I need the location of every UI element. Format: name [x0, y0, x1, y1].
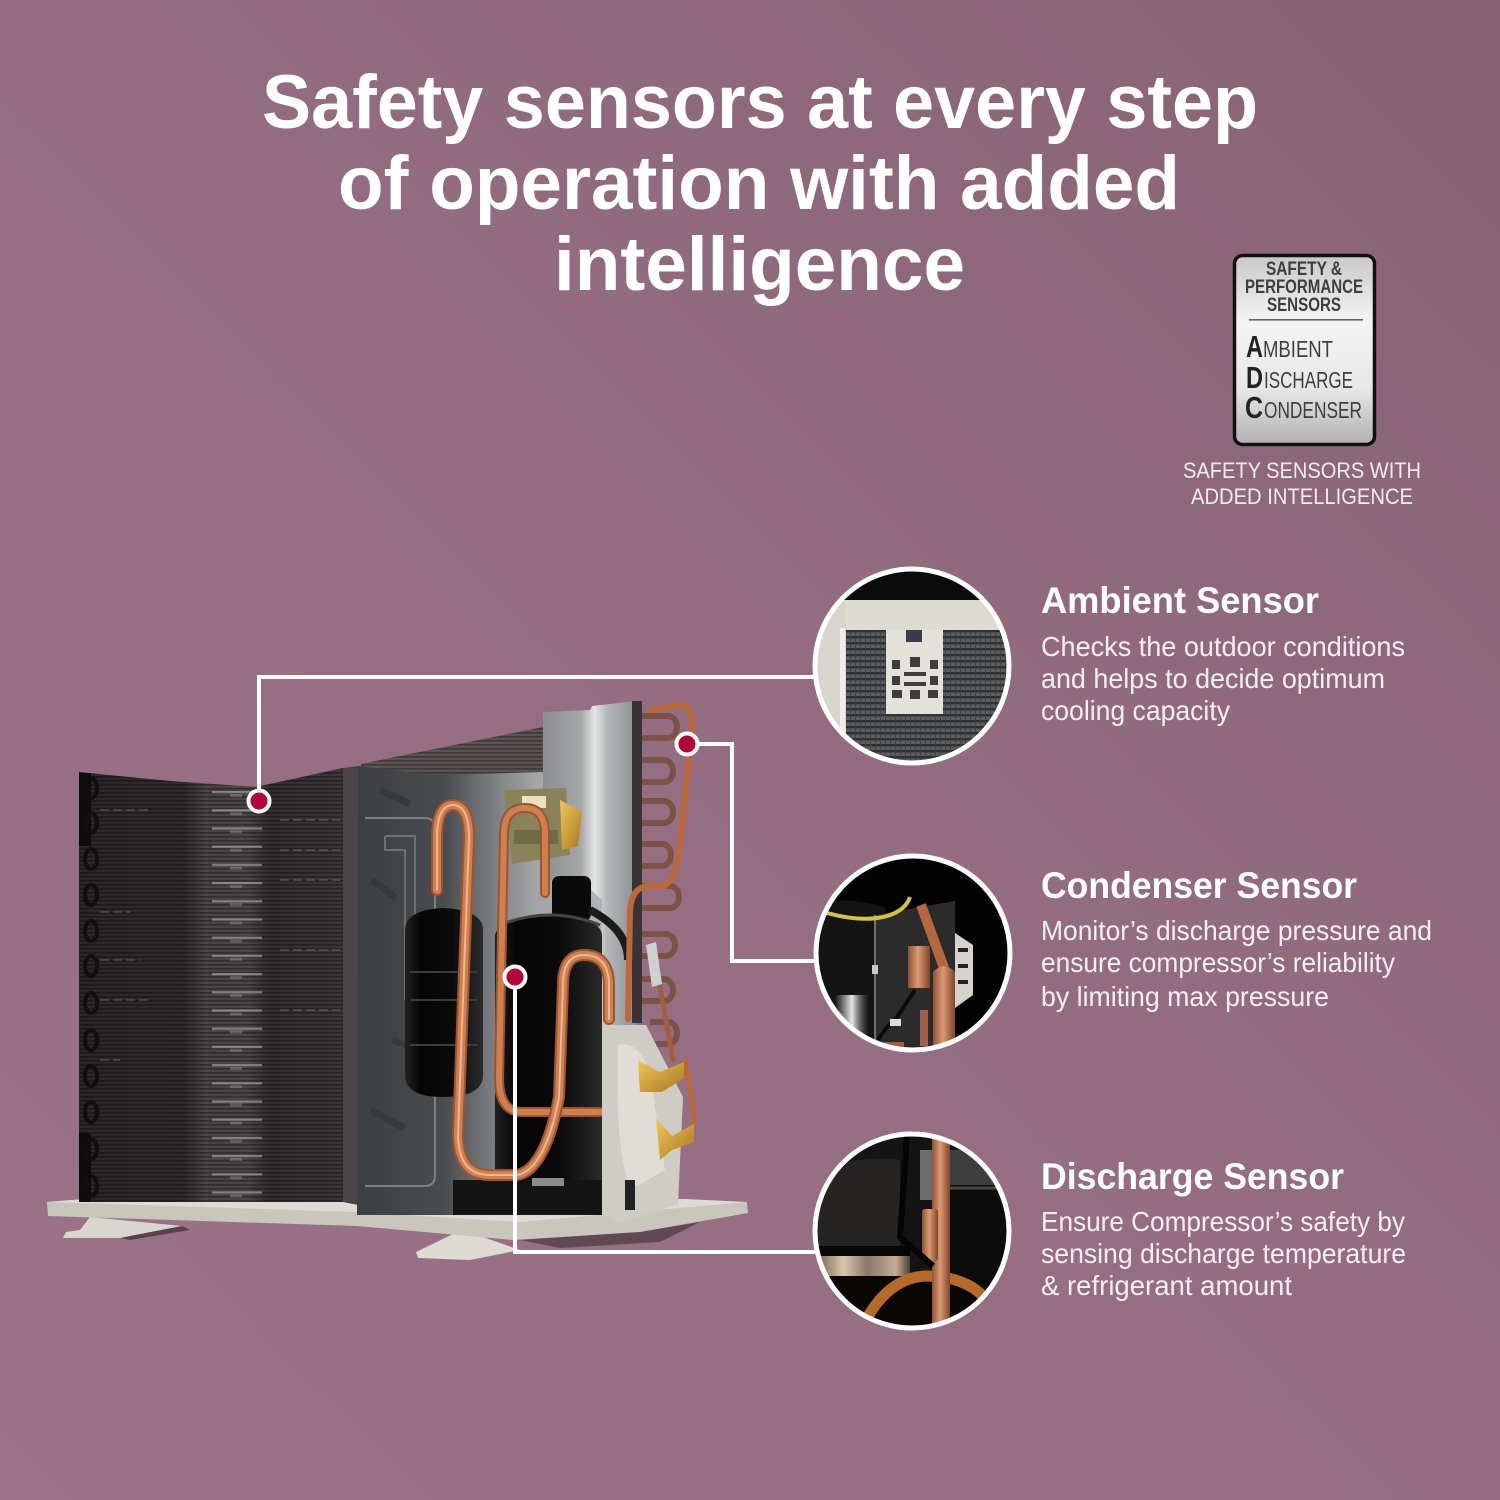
- title: intelligence: [554, 222, 965, 307]
- partition panel: [357, 766, 610, 1215]
- back condenser coil: [361, 727, 543, 790]
- expansion valve: [646, 942, 662, 987]
- unit base and feet: [47, 1199, 748, 1260]
- brass service valves: [638, 1060, 694, 1160]
- condenser sensor text: Condenser Sensor: [1041, 865, 1357, 906]
- badge: ADC sensors: [1234, 256, 1374, 444]
- badge: ADC sensors: ONDENSER: [1264, 397, 1362, 423]
- badge caption: SAFETY SENSORS WITH: [1183, 458, 1421, 483]
- service panel: [602, 1025, 683, 1223]
- inset: discharge sensor: [810, 1130, 1015, 1336]
- badge: ADC sensors: A: [1246, 329, 1263, 364]
- condenser sensor text: by limiting max pressure: [1041, 981, 1329, 1012]
- badge caption: ADDED INTELLIGENCE: [1191, 484, 1413, 509]
- leader line: condenser: [687, 744, 815, 961]
- condenser sensor text: [1041, 865, 1432, 1012]
- galvanized upright: [543, 701, 637, 1025]
- badge: ADC sensors: MBIENT: [1263, 336, 1333, 362]
- marker: discharge: [504, 966, 526, 988]
- marker: ambient: [248, 790, 270, 812]
- copper tubes: [437, 705, 695, 1175]
- badge: ADC sensors: ISCHARGE: [1264, 367, 1353, 393]
- transformer: [504, 788, 582, 864]
- right side coil bends: [640, 716, 679, 1044]
- badge: ADC sensors: SENSORS: [1267, 295, 1341, 316]
- leader line: ambient: [259, 677, 815, 800]
- badge caption: [1183, 458, 1421, 509]
- leader line: discharge: [515, 977, 815, 1252]
- compressor: [453, 876, 628, 1215]
- marker: condenser: [676, 734, 698, 754]
- product: outdoor AC unit cutaway: [47, 701, 748, 1260]
- badge: ADC sensors: PERFORMANCE: [1245, 277, 1363, 298]
- badge: ADC sensors: C: [1245, 390, 1263, 425]
- ambient sensor text: Checks the outdoor conditions: [1041, 631, 1405, 662]
- discharge sensor text: Ensure Compressor’s safety by: [1041, 1206, 1405, 1237]
- side strip: [343, 766, 358, 1205]
- inset: condenser sensor: [814, 854, 1012, 1052]
- discharge sensor text: [1041, 1156, 1406, 1301]
- title: Safety sensors at every step: [262, 60, 1258, 145]
- ambient sensor text: cooling capacity: [1041, 695, 1230, 726]
- condenser sensor text: Monitor’s discharge pressure and: [1041, 915, 1432, 946]
- inset: ambient sensor: [810, 565, 1015, 770]
- discharge sensor text: & refrigerant amount: [1041, 1270, 1292, 1301]
- ambient sensor text: and helps to decide optimum: [1041, 663, 1385, 694]
- accumulator tank: [405, 908, 483, 1097]
- condenser sensor text: ensure compressor’s reliability: [1041, 947, 1395, 978]
- title: of operation with added: [338, 141, 1180, 226]
- title: [262, 60, 1258, 307]
- ambient sensor text: [1041, 580, 1405, 726]
- discharge sensor text: sensing discharge temperature: [1041, 1238, 1406, 1269]
- left condenser coil: [79, 768, 343, 1202]
- discharge sensor text: Discharge Sensor: [1041, 1156, 1344, 1197]
- ambient sensor text: Ambient Sensor: [1041, 580, 1319, 621]
- badge: ADC sensors: D: [1246, 360, 1263, 395]
- badge: ADC sensors: SAFETY &: [1266, 259, 1342, 280]
